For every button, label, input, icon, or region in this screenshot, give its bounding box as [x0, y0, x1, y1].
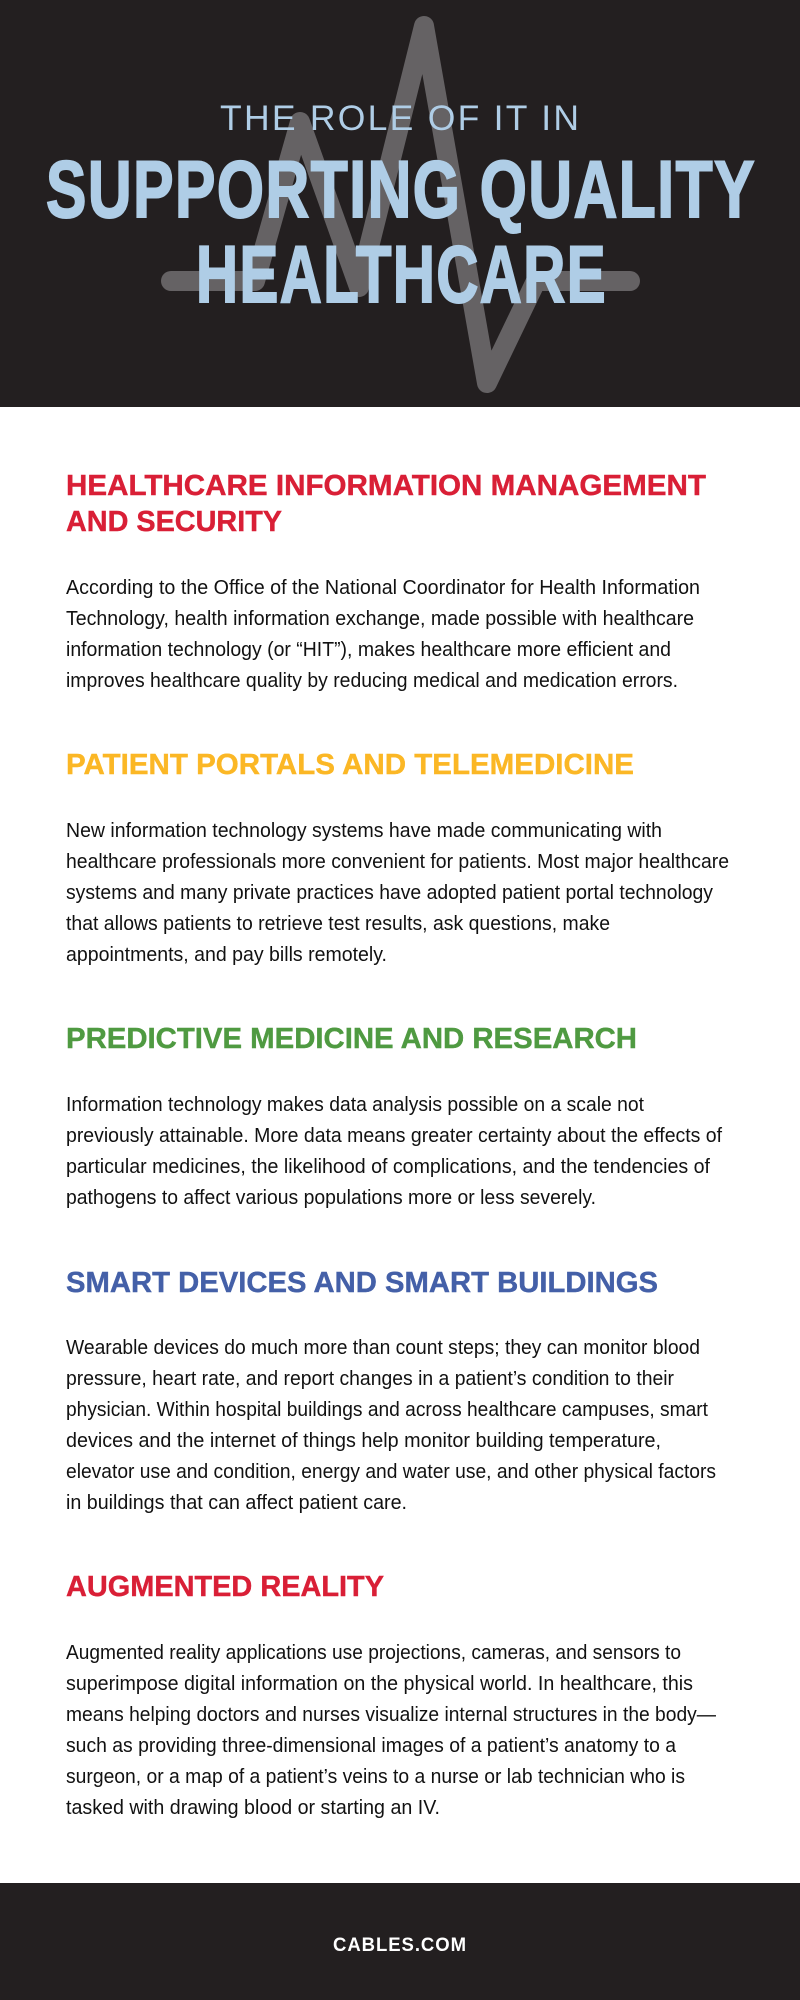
body text: superimpose digital information on the physical world. In healthcare, this	[66, 1673, 693, 1695]
body text: surgeon, or a map of a patient’s veins to a nurse or lab technician who is	[66, 1766, 685, 1788]
heading: HEALTHCARE INFORMATION MANAGEMENT	[66, 470, 706, 502]
body text	[66, 1094, 722, 1209]
body text: improves healthcare quality by reducing medical and medication errors.	[66, 670, 678, 692]
body text: in buildings that can affect patient care.	[66, 1492, 407, 1514]
body text: Information technology makes data analysis possible on a scale not	[66, 1094, 644, 1116]
title: THE ROLE OF IT IN	[220, 98, 579, 138]
body text: healthcare professionals more convenient for patients. Most major healthcare	[66, 851, 729, 873]
body text: tasked with drawing blood or starting an IV.	[66, 1797, 440, 1819]
body text: Technology, health information exchange, made possible with healthcare	[66, 608, 694, 630]
section: patient portals	[66, 749, 729, 966]
body text: devices and the internet of things help monitor building temperature,	[66, 1430, 661, 1452]
section: healthcare information management	[66, 470, 706, 692]
heading: PREDICTIVE MEDICINE AND RESEARCH	[66, 1023, 637, 1055]
body text	[66, 1642, 716, 1819]
body text: previously attainable. More data means greater certainty about the effects of	[66, 1125, 722, 1147]
body text: appointments, and pay bills remotely.	[66, 944, 387, 966]
body text: pressure, heart rate, and report changes in a patient’s condition to their	[66, 1368, 674, 1390]
body text: Augmented reality applications use projections, cameras, and sensors to	[66, 1642, 681, 1664]
body text: particular medicines, the likelihood of complications, and the tendencies of	[66, 1156, 710, 1178]
body text: such as providing three-dimensional images of a patient’s anatomy to a	[66, 1735, 677, 1757]
body text: elevator use and condition, energy and water use, and other physical factors	[66, 1461, 716, 1483]
section: augmented reality	[66, 1571, 716, 1819]
body text: physician. Within hospital buildings and across healthcare campuses, smart	[66, 1399, 708, 1421]
body text: systems and many private practices have adopted patient portal technology	[66, 882, 713, 904]
body text: According to the Office of the National Coordinator for Health Information	[66, 577, 700, 599]
footer	[0, 1883, 800, 2000]
body text: pathogens to affect various populations more or less severely.	[66, 1187, 596, 1209]
footer text: CABLES.COM	[333, 1934, 467, 1956]
section: predictive medicine	[66, 1023, 722, 1209]
body text	[66, 577, 700, 692]
body text: that allows patients to retrieve test results, ask questions, make	[66, 913, 610, 935]
heading: AND SECURITY	[66, 506, 282, 538]
body text	[66, 820, 729, 966]
heading: AUGMENTED REALITY	[66, 1571, 384, 1603]
body text	[66, 1337, 716, 1514]
section: smart devices	[66, 1267, 716, 1514]
heading	[66, 470, 706, 538]
body text: means helping doctors and nurses visualize internal structures in the body—	[66, 1704, 716, 1726]
body text: information technology (or “HIT”), makes healthcare more efficient and	[66, 639, 671, 661]
icon: heartbeat line	[171, 26, 630, 383]
title: HEALTHCARE	[196, 230, 607, 320]
body text: New information technology systems have made communicating with	[66, 820, 662, 842]
body text: Wearable devices do much more than count steps; they can monitor blood	[66, 1337, 700, 1359]
title	[46, 98, 756, 320]
header banner	[0, 0, 800, 407]
heading: SMART DEVICES AND SMART BUILDINGS	[66, 1267, 658, 1299]
heading: PATIENT PORTALS AND TELEMEDICINE	[66, 749, 634, 781]
